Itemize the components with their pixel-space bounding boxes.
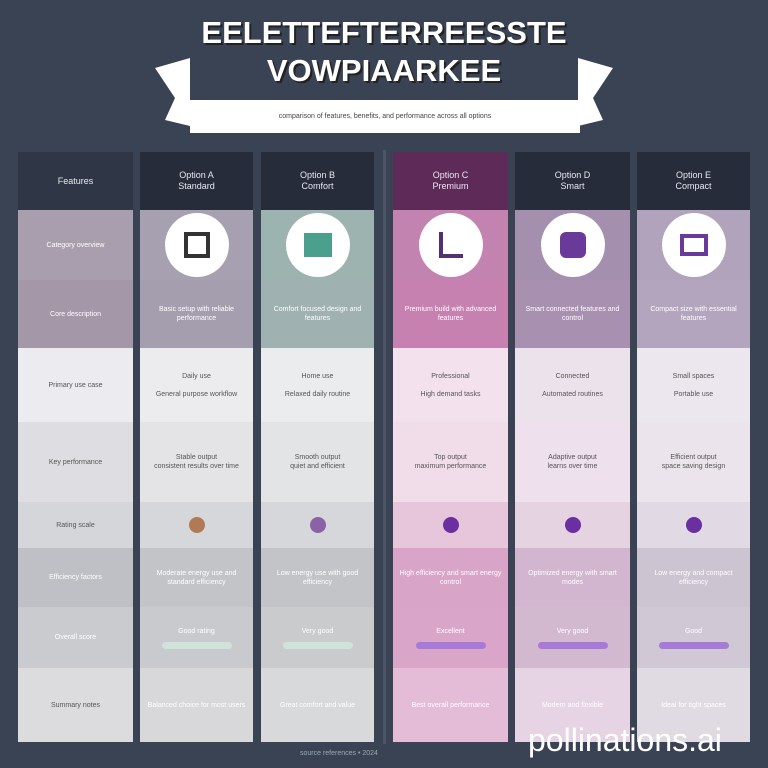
label column: Primary use case xyxy=(48,382,103,388)
label column: Core description xyxy=(50,310,101,318)
column 3: Top output xyxy=(434,454,467,461)
column 1: Daily use xyxy=(182,372,211,380)
column 3: Premium build with advanced features xyxy=(405,306,496,322)
column 4: Optimized energy with smart modes xyxy=(528,570,617,586)
column 1: Moderate energy use and standard efficiency xyxy=(157,570,236,586)
column 5: Small spaces xyxy=(673,372,714,380)
icon 4 xyxy=(540,213,604,277)
column 5: space saving design xyxy=(662,463,725,470)
divider xyxy=(383,150,386,744)
label column: Features xyxy=(58,176,93,186)
column 1: Standard xyxy=(178,181,215,191)
footer note: source references • 2024 xyxy=(300,750,378,757)
column 3: Excellent xyxy=(436,628,465,634)
column 4: Automated routines xyxy=(542,390,603,398)
column 5: Option E xyxy=(676,170,711,180)
column 3: maximum performance xyxy=(415,463,486,470)
subtitle xyxy=(190,100,580,133)
label column xyxy=(18,152,133,742)
column 4: learns over time xyxy=(548,463,597,470)
column 4: Smart connected features and control xyxy=(526,306,619,322)
column 5: Compact size with essential features xyxy=(650,306,737,322)
column 1: Option A xyxy=(179,170,214,180)
column 2: Smooth output xyxy=(295,454,340,461)
column 4 xyxy=(515,152,630,742)
icon 2 xyxy=(286,213,350,277)
label column: Efficiency factors xyxy=(49,574,102,581)
column 2: Option B xyxy=(300,170,335,180)
column 5 xyxy=(637,152,750,742)
column 2: Very good xyxy=(302,628,333,634)
label column: Category overview xyxy=(47,242,104,248)
label column: Rating scale xyxy=(56,522,95,528)
icon 1 xyxy=(164,213,228,277)
column 5: Compact xyxy=(675,181,712,191)
column 3: Premium xyxy=(432,181,468,191)
column 2: Low energy use with good efficiency xyxy=(277,570,358,586)
column 4: Very good xyxy=(557,628,588,634)
column 4: Smart xyxy=(560,181,584,191)
title xyxy=(201,15,568,88)
label column: Summary notes xyxy=(51,702,100,708)
column 1: consistent results over time xyxy=(154,463,239,470)
column 3: High efficiency and smart energy control xyxy=(400,570,501,586)
column 1: Good rating xyxy=(178,628,215,634)
column 2: Home use xyxy=(302,372,333,380)
column 4: Option D xyxy=(555,170,590,180)
column 3: High demand tasks xyxy=(421,390,480,398)
column 4: Adaptive output xyxy=(548,454,597,461)
column 4: Connected xyxy=(556,372,589,380)
watermark: pollinations.ai xyxy=(528,722,722,758)
icon 5 xyxy=(662,213,726,277)
column 1: General purpose workflow xyxy=(156,390,237,398)
column 1: Basic setup with reliable performance xyxy=(159,306,234,322)
column 3: Option C xyxy=(433,170,468,180)
column 5: Efficient output xyxy=(670,454,717,461)
column 3: Best overall performance xyxy=(412,702,489,708)
column 1: Balanced choice for most users xyxy=(148,702,245,708)
column 2 xyxy=(261,152,374,742)
column 1: Stable output xyxy=(176,454,217,461)
title: VOWPIAARKEE xyxy=(267,53,501,88)
ribbon banner xyxy=(155,58,613,133)
column 4: Modern and flexible xyxy=(542,702,603,708)
column 5: Portable use xyxy=(674,390,713,398)
label column: Key performance xyxy=(49,458,102,466)
column 5: Ideal for tight spaces xyxy=(661,702,726,708)
column 3: Professional xyxy=(431,372,470,380)
column 2: Comfort focused design and features xyxy=(274,306,361,322)
icon 3 xyxy=(418,213,482,277)
column 2: Relaxed daily routine xyxy=(285,390,350,398)
column 5: Good xyxy=(685,628,702,634)
label column: Overall score xyxy=(55,634,96,641)
column 2: Comfort xyxy=(301,181,334,191)
title: EELETTEFTERREESSTE xyxy=(201,15,567,50)
column 3 xyxy=(393,152,508,742)
column 2: Great comfort and value xyxy=(280,702,355,708)
column 5: Low energy and compact efficiency xyxy=(654,570,733,586)
column 1 xyxy=(140,152,253,742)
subtitle: comparison of features, benefits, and performance across all options xyxy=(279,113,491,120)
column 2: quiet and efficient xyxy=(290,463,345,470)
